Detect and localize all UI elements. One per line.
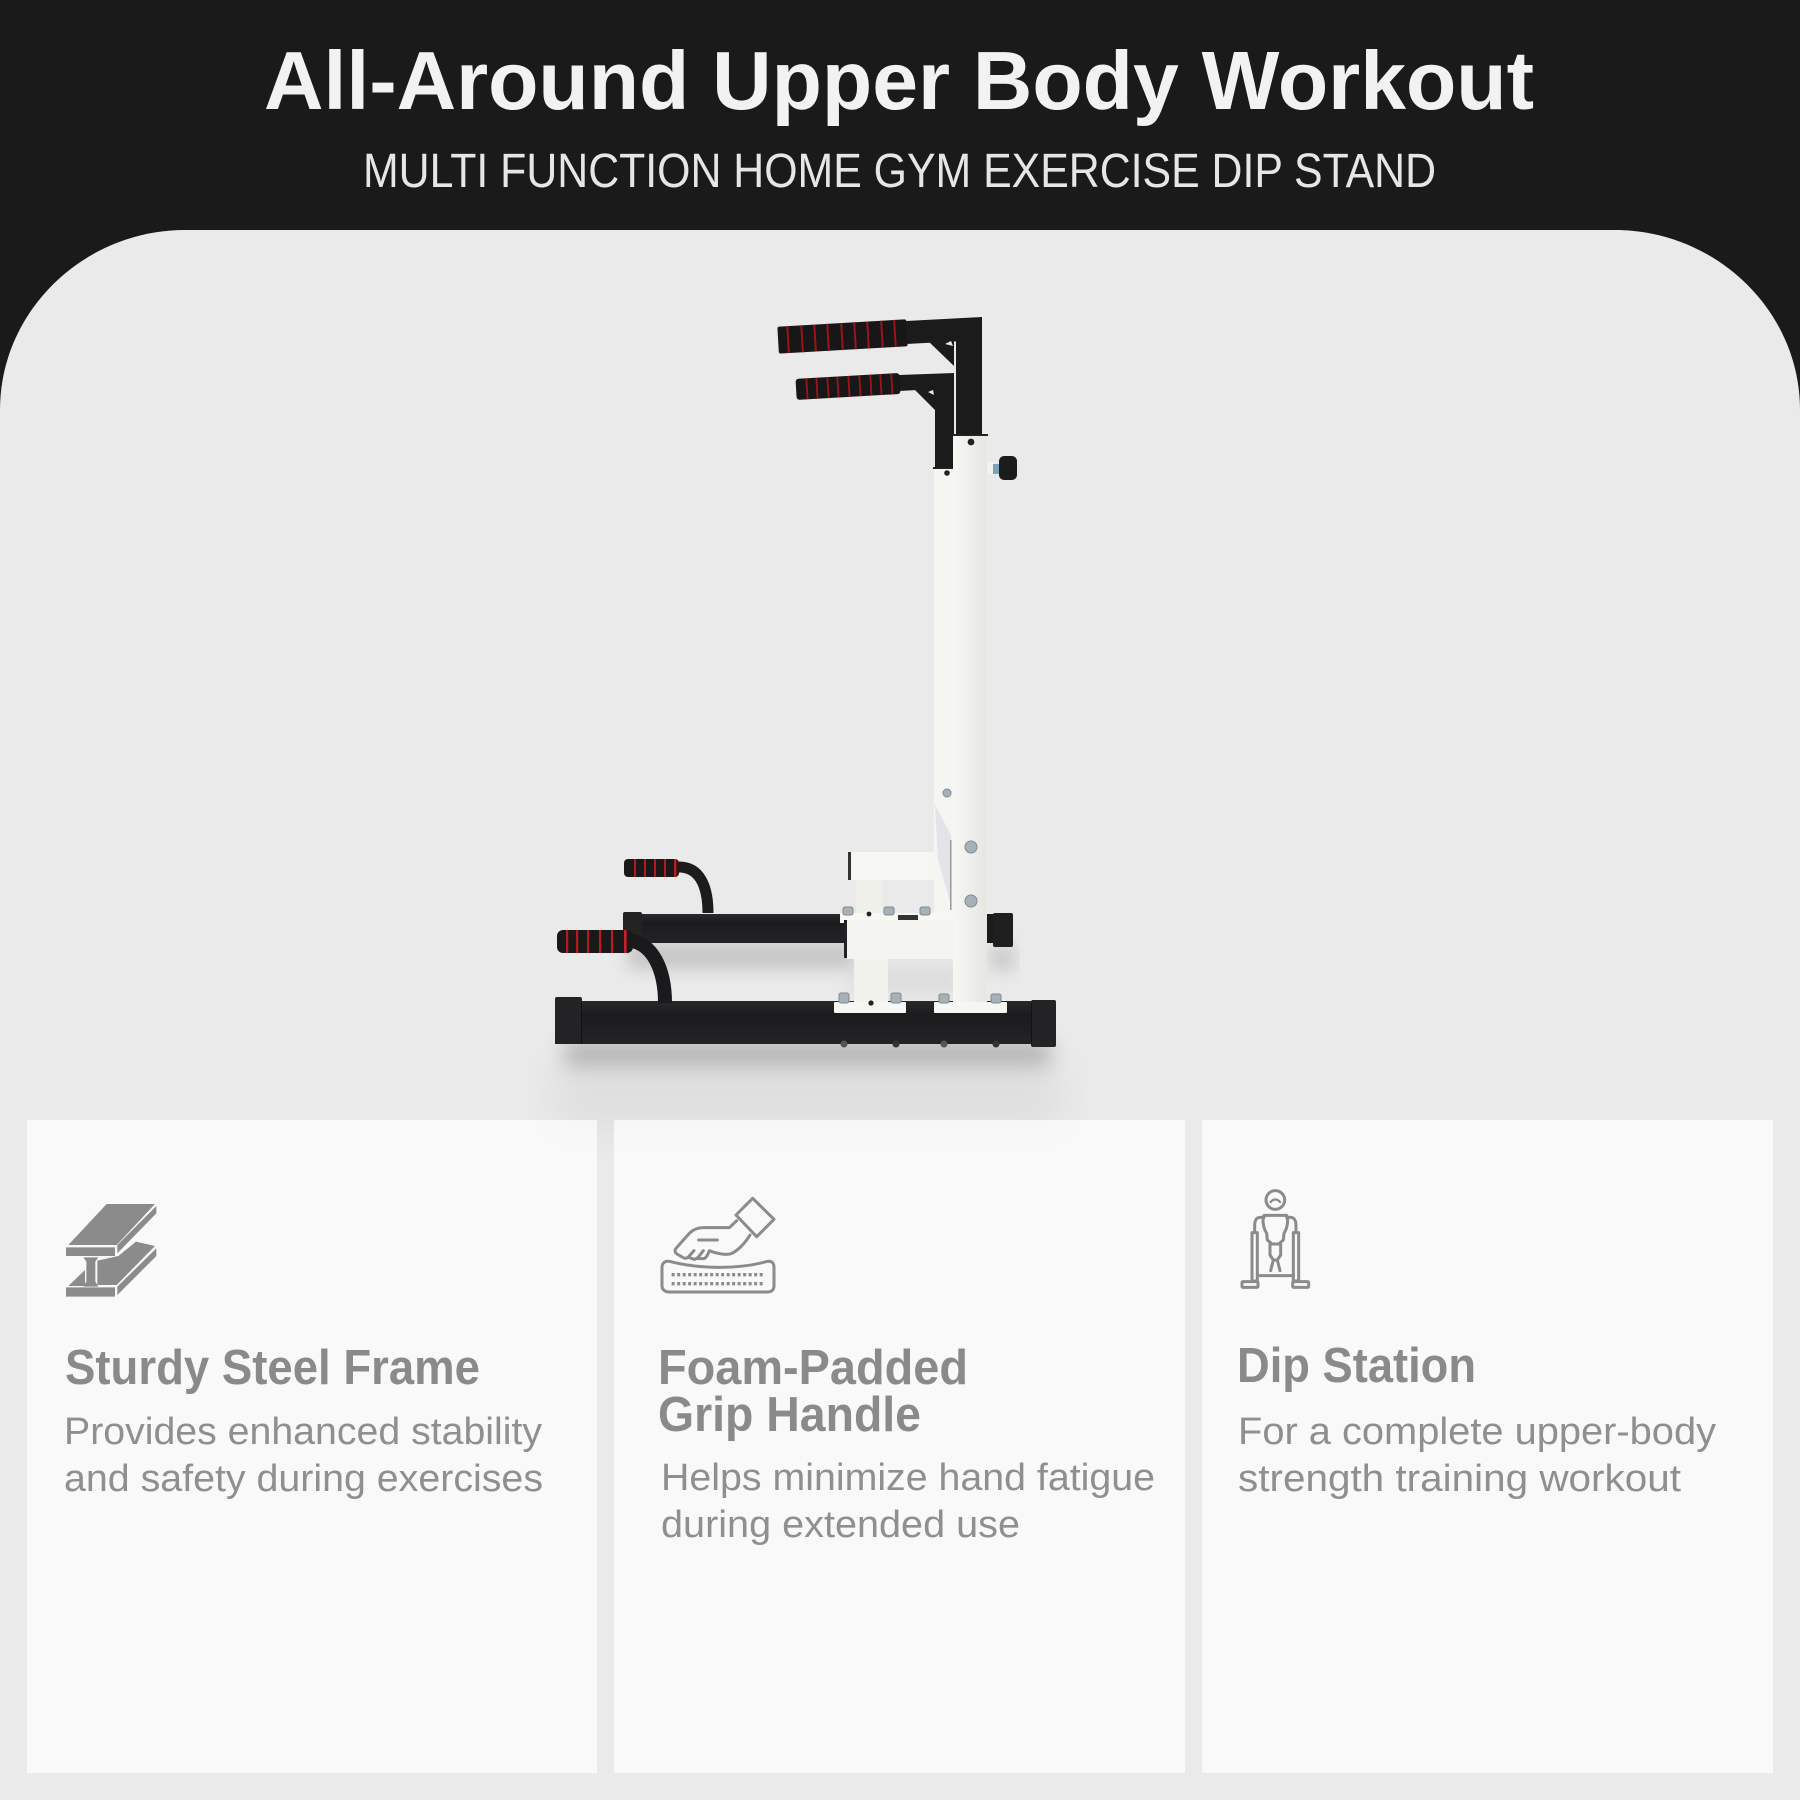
adjustment knob [987,456,1017,480]
lower foam grip [796,373,901,400]
icon: steel i-beam [66,1204,156,1297]
heading: Dip Station [1237,1339,1476,1393]
icon: hand pressing foam [662,1198,774,1292]
white uprights [933,434,988,1007]
upper foam grip [777,319,908,354]
description: during extended use [661,1504,1020,1546]
card background [27,1120,597,1773]
back floor grip [624,859,708,913]
card background [1202,1120,1773,1773]
front floor grip [557,930,665,1003]
panel: sturdy steel frame [27,1120,597,1773]
white lower brackets [834,852,1007,1013]
heading: Sturdy Steel Frame [65,1341,480,1395]
card background [614,1120,1185,1773]
back base rail [623,912,1013,947]
panel: foam-padded grip handle [614,1120,1185,1773]
panel: dip station [1202,1120,1773,1773]
header band [0,0,1800,420]
title: All-Around Upper Body Workout [264,34,1534,127]
bolts [839,789,1001,1003]
subtitle: MULTI FUNCTION HOME GYM EXERCISE DIP STAND [363,145,1436,198]
icon: person on dip bars [1242,1191,1309,1287]
product photo: dip stand [555,317,1056,1048]
description: and safety during exercises [64,1458,543,1500]
upper handle frame [906,317,982,436]
description: For a complete upper-body [1238,1411,1716,1453]
heading: Grip Handle [658,1388,921,1442]
heading: Foam-Padded [658,1341,968,1395]
description: strength training workout [1238,1458,1681,1500]
lower handle frame [899,373,954,469]
floor shadow [555,943,1060,1130]
description: Provides enhanced stability [64,1411,542,1453]
front base rail [555,997,1056,1048]
description: Helps minimize hand fatigue [661,1457,1155,1499]
